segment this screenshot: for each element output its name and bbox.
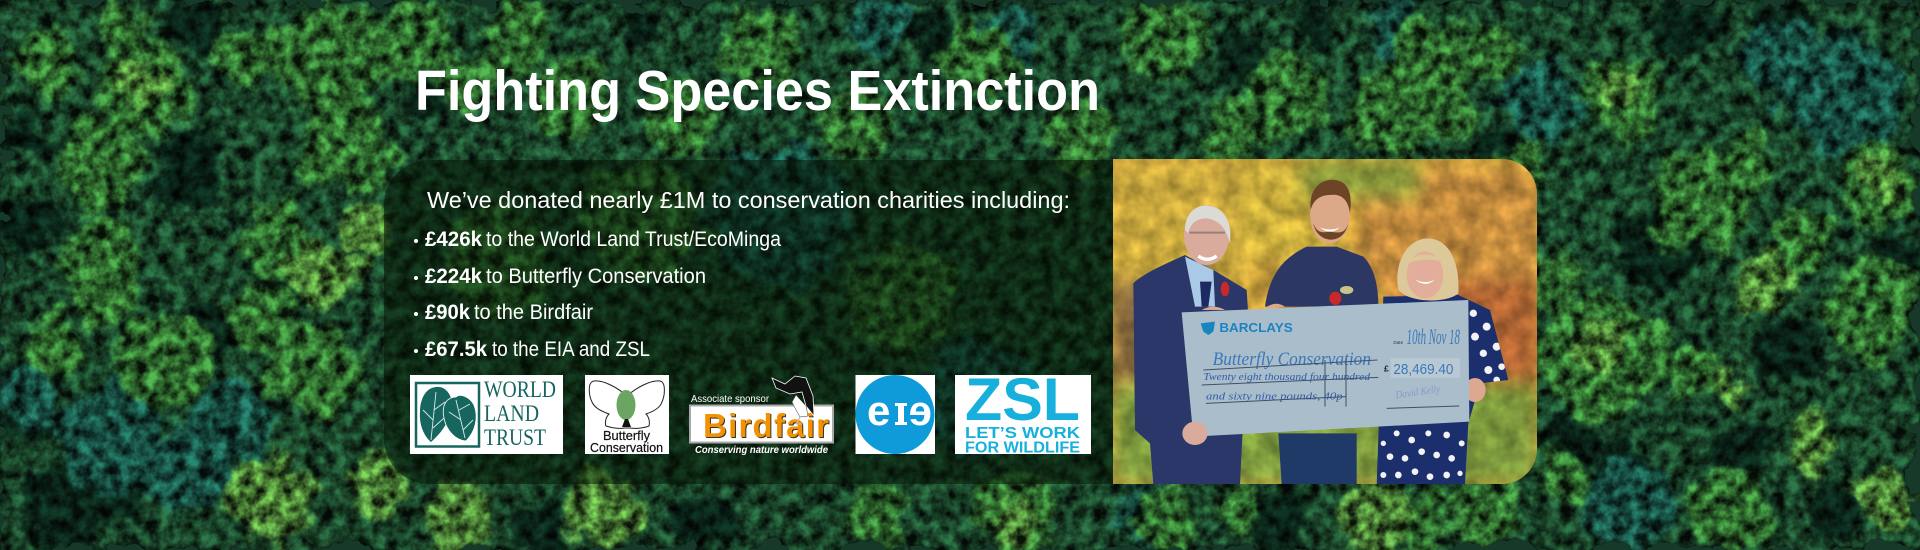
logo: ZSL: LET’S WORK (965, 425, 1081, 442)
logo: ZSL (955, 366, 1091, 456)
text: EIA and ZSL donation (414, 338, 650, 361)
logo: Butterfly Conservation: Butterfly (603, 429, 651, 443)
text: EIA and ZSL donation: to the EIA and ZSL (492, 338, 650, 361)
photo background: autumn foliage and lawn (1113, 159, 1540, 484)
cheque: 10th Nov 18 (1407, 324, 1460, 349)
person: left man (1133, 205, 1248, 484)
photo: cheque presentation (1113, 159, 1540, 484)
heading: donations intro: We’ve donated nearly £1M to conservation charities including: (427, 187, 1070, 213)
person: right woman (1373, 238, 1513, 484)
logo: Birdfair: Birdfair (704, 408, 830, 445)
logo: World Land Trust: TRUST (484, 425, 546, 450)
person: middle man (1265, 180, 1378, 484)
cheque figure (1384, 358, 1460, 378)
text: Birdfair donation: £90k (425, 301, 470, 324)
cheque amount in words, second line: and sixty nine pounds, 40p (1206, 391, 1343, 402)
logo: EIA: e (867, 387, 890, 434)
text: Birdfair donation (414, 301, 593, 324)
icon: magpie (772, 376, 814, 424)
logo: Birdfair: Associate sponsor (691, 393, 769, 405)
logo: Butterfly Conservation: Conservation (590, 441, 663, 455)
title: Fighting Species Extinction (415, 59, 1100, 123)
cheque bank name: BARCLAYS (1219, 321, 1293, 335)
logo: ZSL: ZSL (965, 366, 1080, 433)
panel: translucent dark panel (384, 160, 1114, 484)
cheque figure: £ (1384, 364, 1389, 374)
logo: World Land Trust (410, 375, 563, 454)
text: EIA and ZSL donation: £67.5k (425, 338, 487, 361)
text: Birdfair donation: to the Birdfair (474, 301, 593, 324)
logo: World Land Trust: WORLD (484, 377, 556, 402)
cheque date (1394, 328, 1460, 344)
text: Butterfly Conservation donation: £224k (425, 265, 482, 288)
logo: Birdfair (690, 376, 833, 456)
logo: Butterfly Conservation (585, 375, 669, 455)
text: Butterfly Conservation donation: to Butterfly Conservation (486, 265, 706, 288)
text: World Land Trust donation: to the World Land Trust/EcoMinga (486, 228, 781, 251)
cheque (1182, 300, 1469, 445)
logo: EIA (856, 375, 935, 454)
logo: Birdfair: Birdfair (703, 407, 829, 444)
logo: ZSL: FOR WILDLIFE (965, 440, 1080, 456)
cheque figure: 28,469.40 (1393, 362, 1453, 378)
cheque signature: David Kelly (1394, 384, 1441, 401)
logo: Birdfair: Conserving nature worldwide (695, 444, 828, 456)
cheque amount in words: Twenty eight thousand four hundred (1203, 372, 1371, 383)
text: World Land Trust donation: £426k (425, 228, 482, 251)
logo: EIA: e (909, 387, 932, 434)
cheque date: Date (1393, 340, 1404, 345)
cheque payee: Butterfly Conservation (1213, 349, 1371, 370)
logo: World Land Trust: LAND (484, 401, 539, 426)
